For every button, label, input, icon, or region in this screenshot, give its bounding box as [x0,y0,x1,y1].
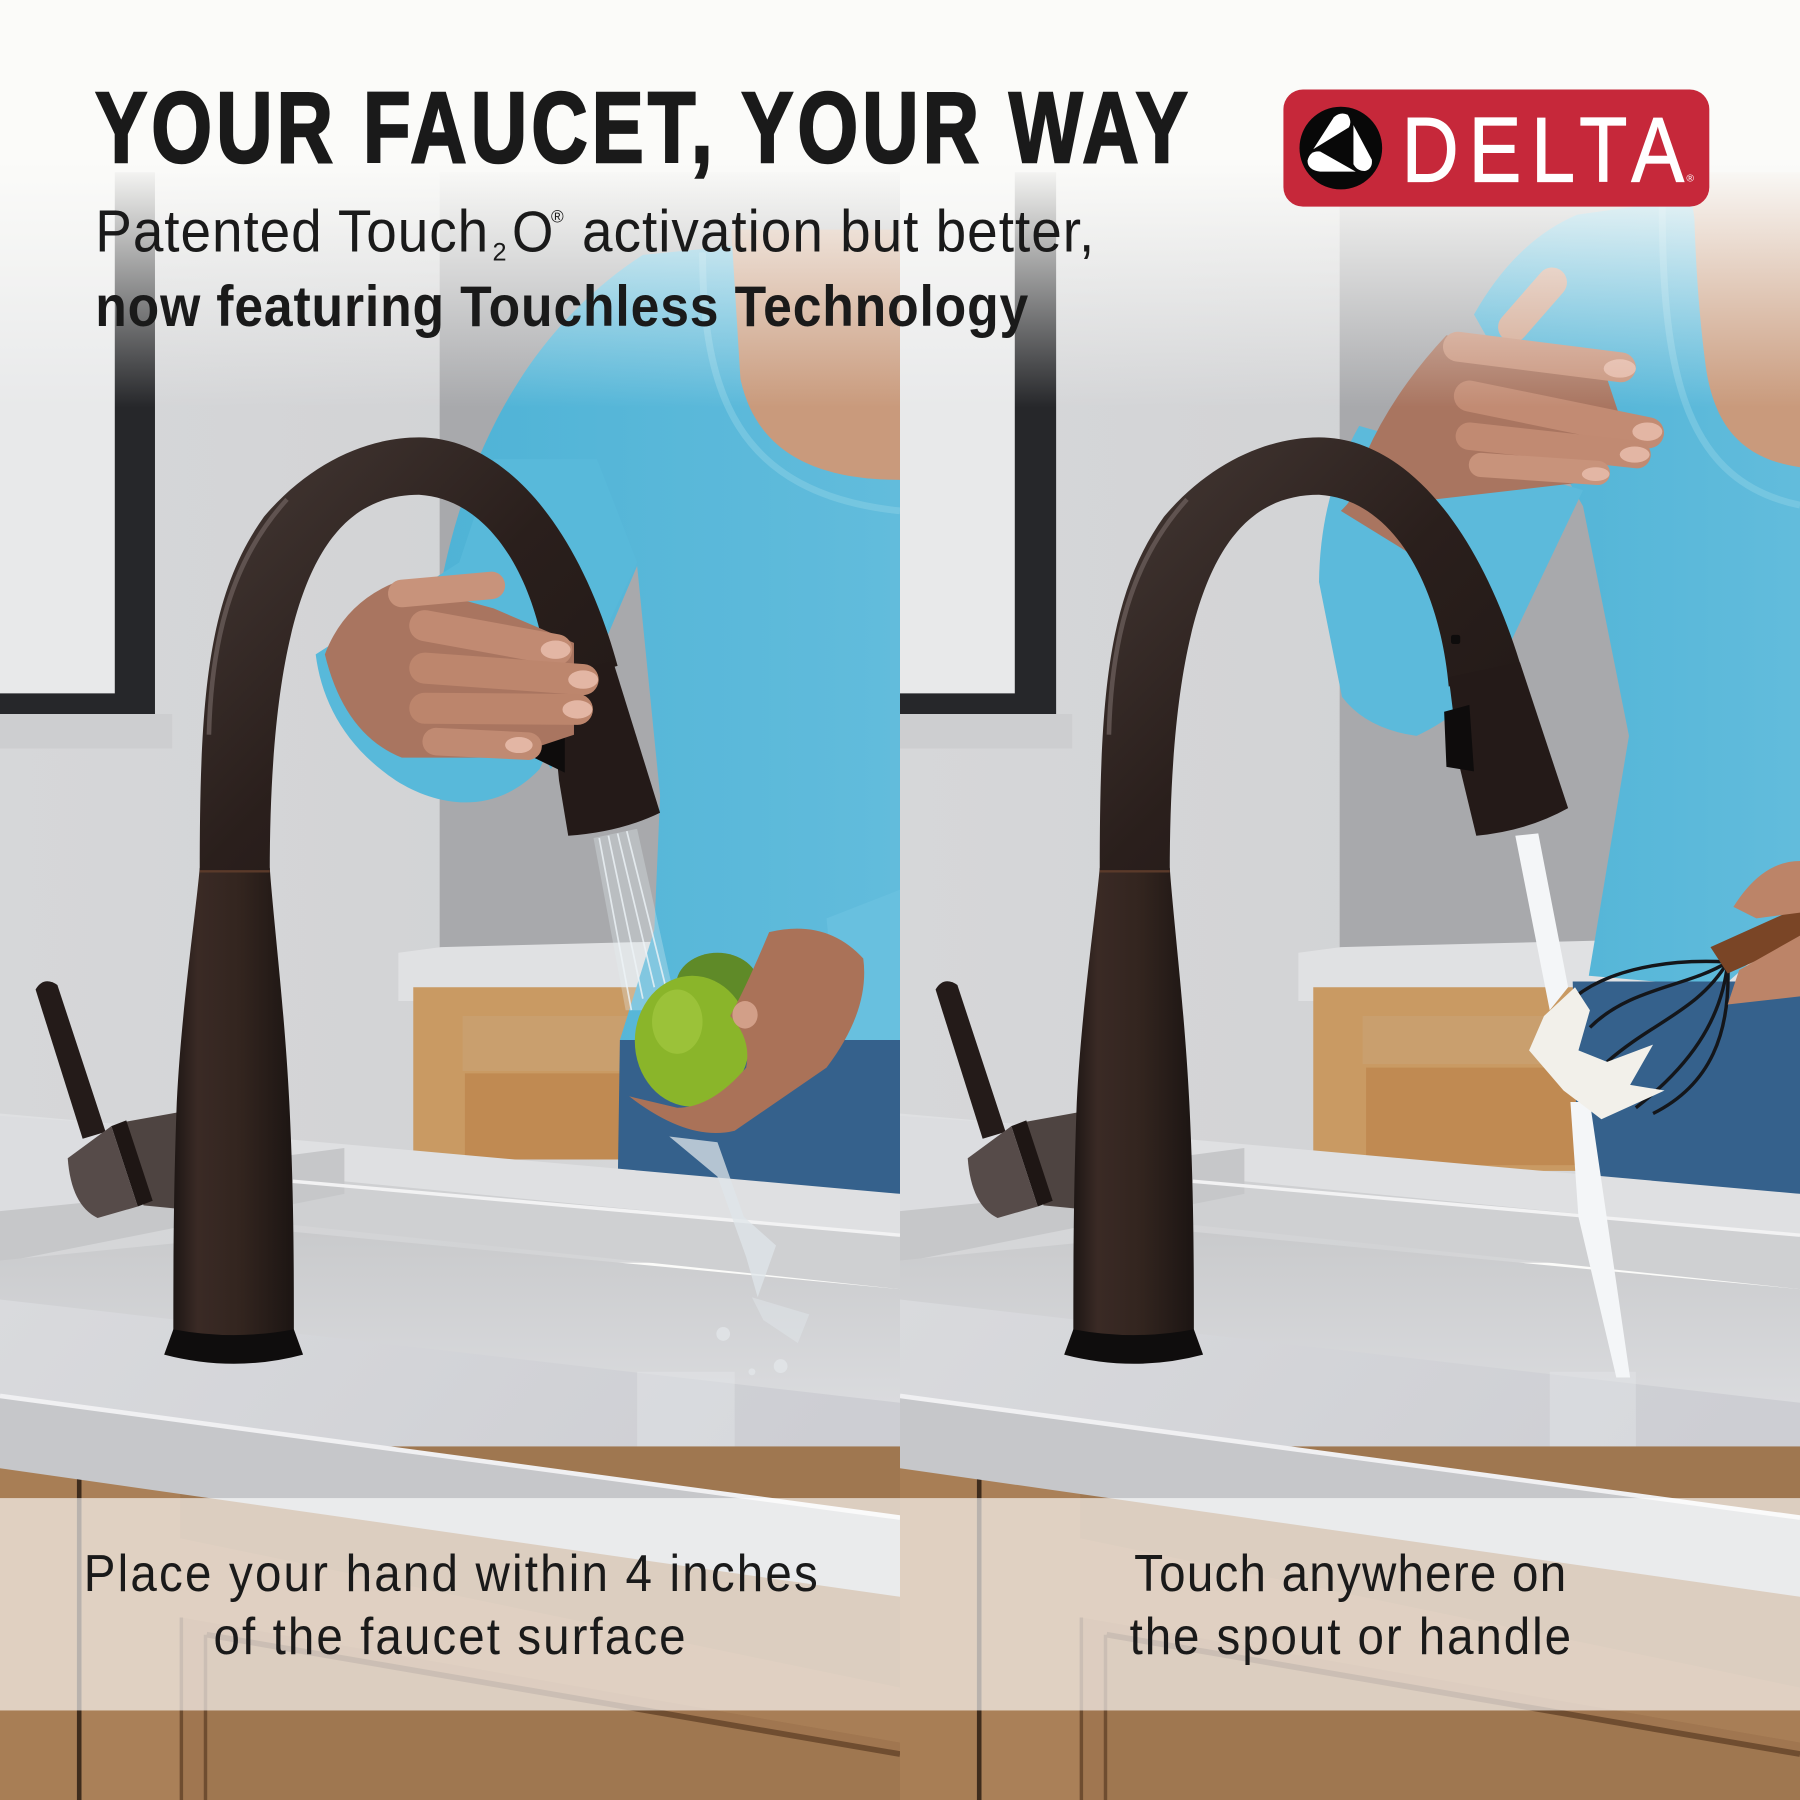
panel: touchless activation photo [0,0,900,1800]
water spray [593,829,677,1010]
lower sweater cuff [827,911,850,1040]
spray head [558,666,660,836]
front counter top [900,1299,1800,1520]
sink basin [0,1232,900,1403]
caption: touch: the spout or handle [1130,1607,1571,1666]
sweater neckline trim [703,253,900,511]
caption: touchless: of the faucet surface [214,1607,686,1666]
sleeve [316,548,543,802]
caption: touchless: Place your hand within 4 inches [84,1544,818,1603]
spray button [1444,705,1474,771]
faucet base [164,1329,303,1364]
mirror with dark frame [0,174,155,748]
faucet body [1073,868,1194,1345]
counter reflection [1550,1372,1636,1481]
spray button [534,738,565,772]
sweater neckline trim [1662,207,1800,505]
caption: touchless [84,1544,818,1666]
spout highlight [1109,499,1187,735]
subtitle line one: O [512,200,553,264]
counter reflection [638,1373,734,1446]
wood cabinet [1313,987,1589,1171]
subtitle line one: activation but better, [582,198,1094,265]
caption: touch [1130,1544,1571,1666]
subtitle line one: 2 [492,239,507,267]
counter front edge [900,1396,1800,1597]
faucet [936,437,1568,1364]
faucet spout [200,437,618,872]
hand over faucet [325,582,598,758]
woman's torso in blue sweater [1474,184,1800,987]
faucet lever handle [936,981,1006,1139]
back counter [900,1114,1800,1289]
faucet lever handle [36,981,106,1139]
back shelf [1298,940,1650,1001]
caption band left [0,1498,900,1710]
wood lower cabinet [0,1446,900,1800]
woman's torso in blue sweater [442,230,900,1040]
back shelf [398,942,650,1001]
hand holding lime [629,929,864,1133]
neckline skin [731,230,900,480]
faucet body [173,868,294,1345]
caption: touch: Touch anywhere on [1134,1544,1566,1603]
spray head [1449,662,1568,836]
kitchen wall [900,211,1576,1263]
collar seam [200,870,270,872]
mirror with dark frame [900,172,1072,748]
subtitle line one: ® [551,207,564,227]
caption band right [900,1498,1800,1710]
faucet spout [1100,437,1522,872]
wood cabinet [413,987,643,1159]
hand holding whisk [1728,861,1800,1004]
top white fade [0,0,1800,408]
subtitle line one [95,198,1094,267]
Delta logo [1283,90,1709,207]
faucet [36,437,660,1364]
raised hand [1341,282,1662,553]
Delta logo: ® [1686,173,1694,184]
faucet hub [126,1112,176,1208]
sink basin [900,1232,1800,1423]
back counter [0,1114,900,1289]
icon: Delta triangle mark [1299,107,1382,189]
sleeve [1319,426,1583,736]
panel: touch activation photo [900,0,1800,1800]
sensor dot [1451,635,1460,644]
kitchen wall [0,211,650,1263]
jeans [1573,982,1800,1194]
water stream [1515,833,1630,1378]
water splash [669,1136,809,1375]
title: YOUR FAUCET, YOUR WAY [95,72,1188,183]
spout highlight [209,499,287,735]
lime [635,953,759,1107]
subtitle line two: now featuring Touchless Technology [95,275,1029,339]
neckline skin [1688,172,1800,467]
front counter top [0,1300,900,1446]
subtitle line one: Patented Touch [95,198,488,265]
counter front edge [0,1396,900,1597]
faucet base [1064,1329,1203,1364]
wood lower cabinet [900,1446,1800,1800]
jeans [618,1040,900,1194]
faucet hub [1021,1112,1078,1209]
wordmark: DELTA [1402,99,1684,202]
dark alcove wall [1340,207,1629,948]
whisk [1529,907,1800,1119]
dark alcove wall [440,172,900,953]
collar seam [1100,870,1170,872]
